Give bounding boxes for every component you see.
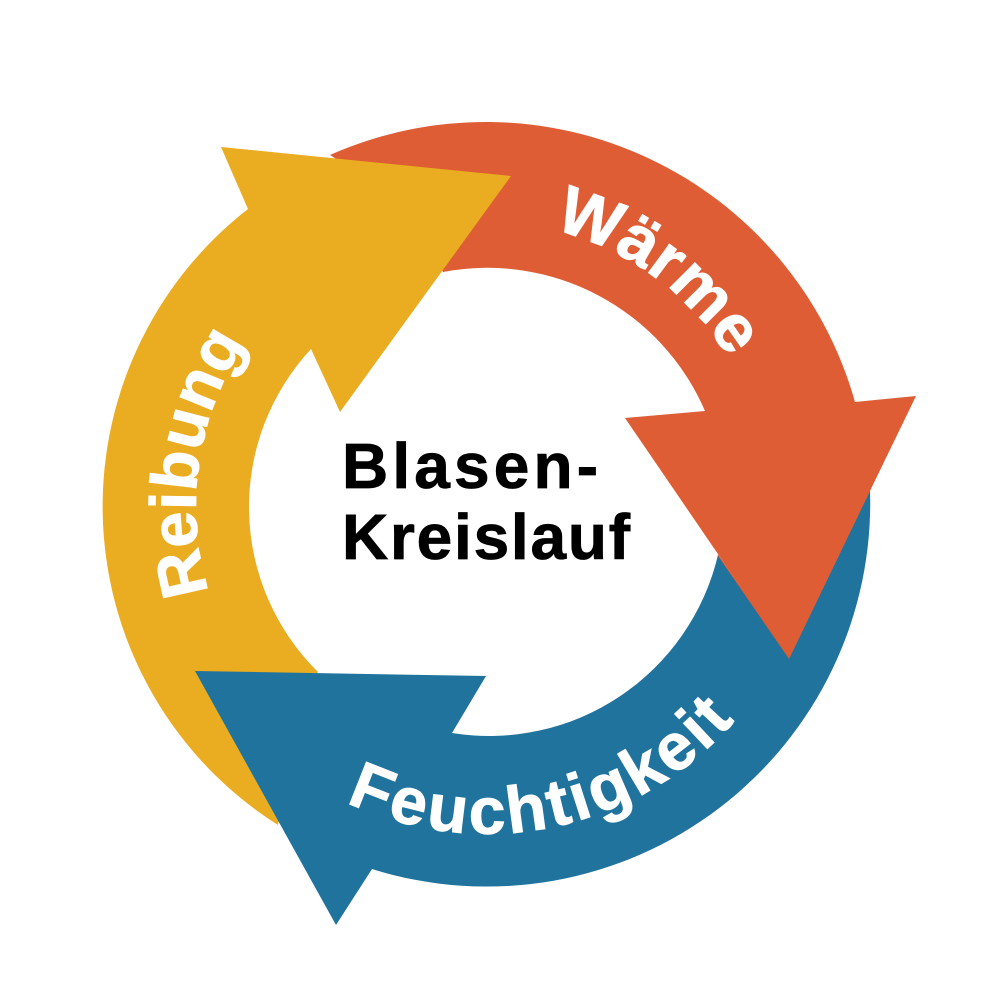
label: Wärme: Wärme [564, 184, 752, 352]
center title: Blasen- [342, 430, 598, 502]
label: Feuchtigkeit: Feuchtigkeit [349, 696, 734, 835]
center title: Kreislauf [342, 501, 631, 573]
arrow: Reibung (yellow) [102, 147, 511, 825]
center title [342, 430, 631, 573]
arrow: Feuchtigkeit (blue) [195, 491, 870, 925]
label: Reibung: Reibung [148, 328, 250, 598]
